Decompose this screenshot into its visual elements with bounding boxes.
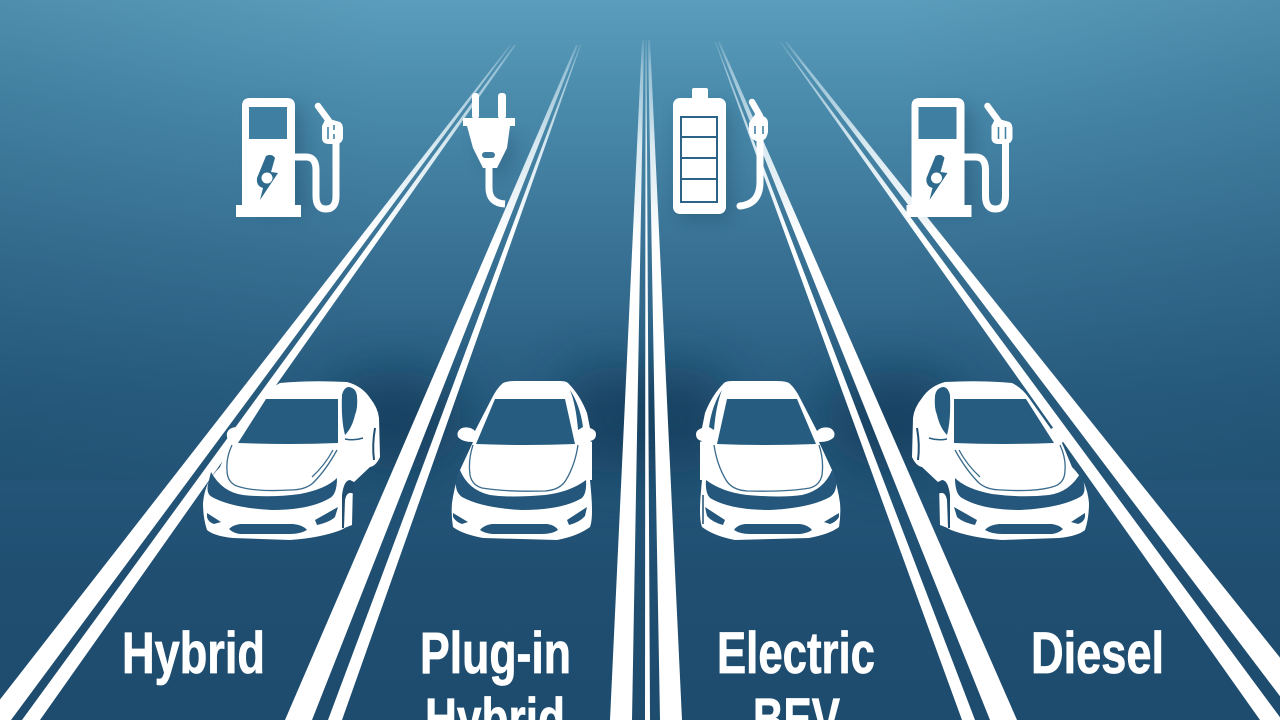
line: electric right thick bbox=[718, 42, 1017, 720]
line: centre right thick bbox=[648, 40, 682, 720]
icon: plug bbox=[463, 93, 518, 204]
label: Electric BEV bbox=[717, 621, 875, 720]
icon: diesel fuel pump bbox=[906, 98, 1012, 217]
line: plug-in left thin bbox=[328, 45, 581, 720]
icon: hybrid fuel pump bbox=[236, 98, 343, 217]
line: electric right thin bbox=[715, 42, 975, 720]
line: centre left thick bbox=[610, 40, 644, 720]
line: diesel right thin bbox=[780, 42, 1280, 720]
label: Hybrid: Hybrid bbox=[122, 621, 265, 686]
label: Plug-in Hybrid: Plug-in bbox=[420, 621, 571, 686]
car: electric BEV bbox=[696, 381, 840, 540]
line: centre thin bbox=[645, 40, 650, 720]
line: diesel right thick bbox=[785, 42, 1280, 720]
label: Plug-in Hybrid bbox=[420, 621, 571, 720]
line: hybrid left thick bbox=[0, 45, 511, 720]
line: hybrid left thin bbox=[22, 45, 516, 720]
label: Electric BEV: Electric bbox=[717, 621, 875, 686]
label: Diesel: Diesel bbox=[1031, 621, 1164, 686]
line: plug-in left thick bbox=[285, 45, 578, 720]
car shadow glow bbox=[325, 365, 965, 475]
car: diesel bbox=[912, 381, 1089, 540]
icon: battery with nozzle bbox=[673, 88, 768, 220]
car: hybrid bbox=[203, 381, 380, 540]
car: plug-in hybrid bbox=[452, 381, 596, 540]
